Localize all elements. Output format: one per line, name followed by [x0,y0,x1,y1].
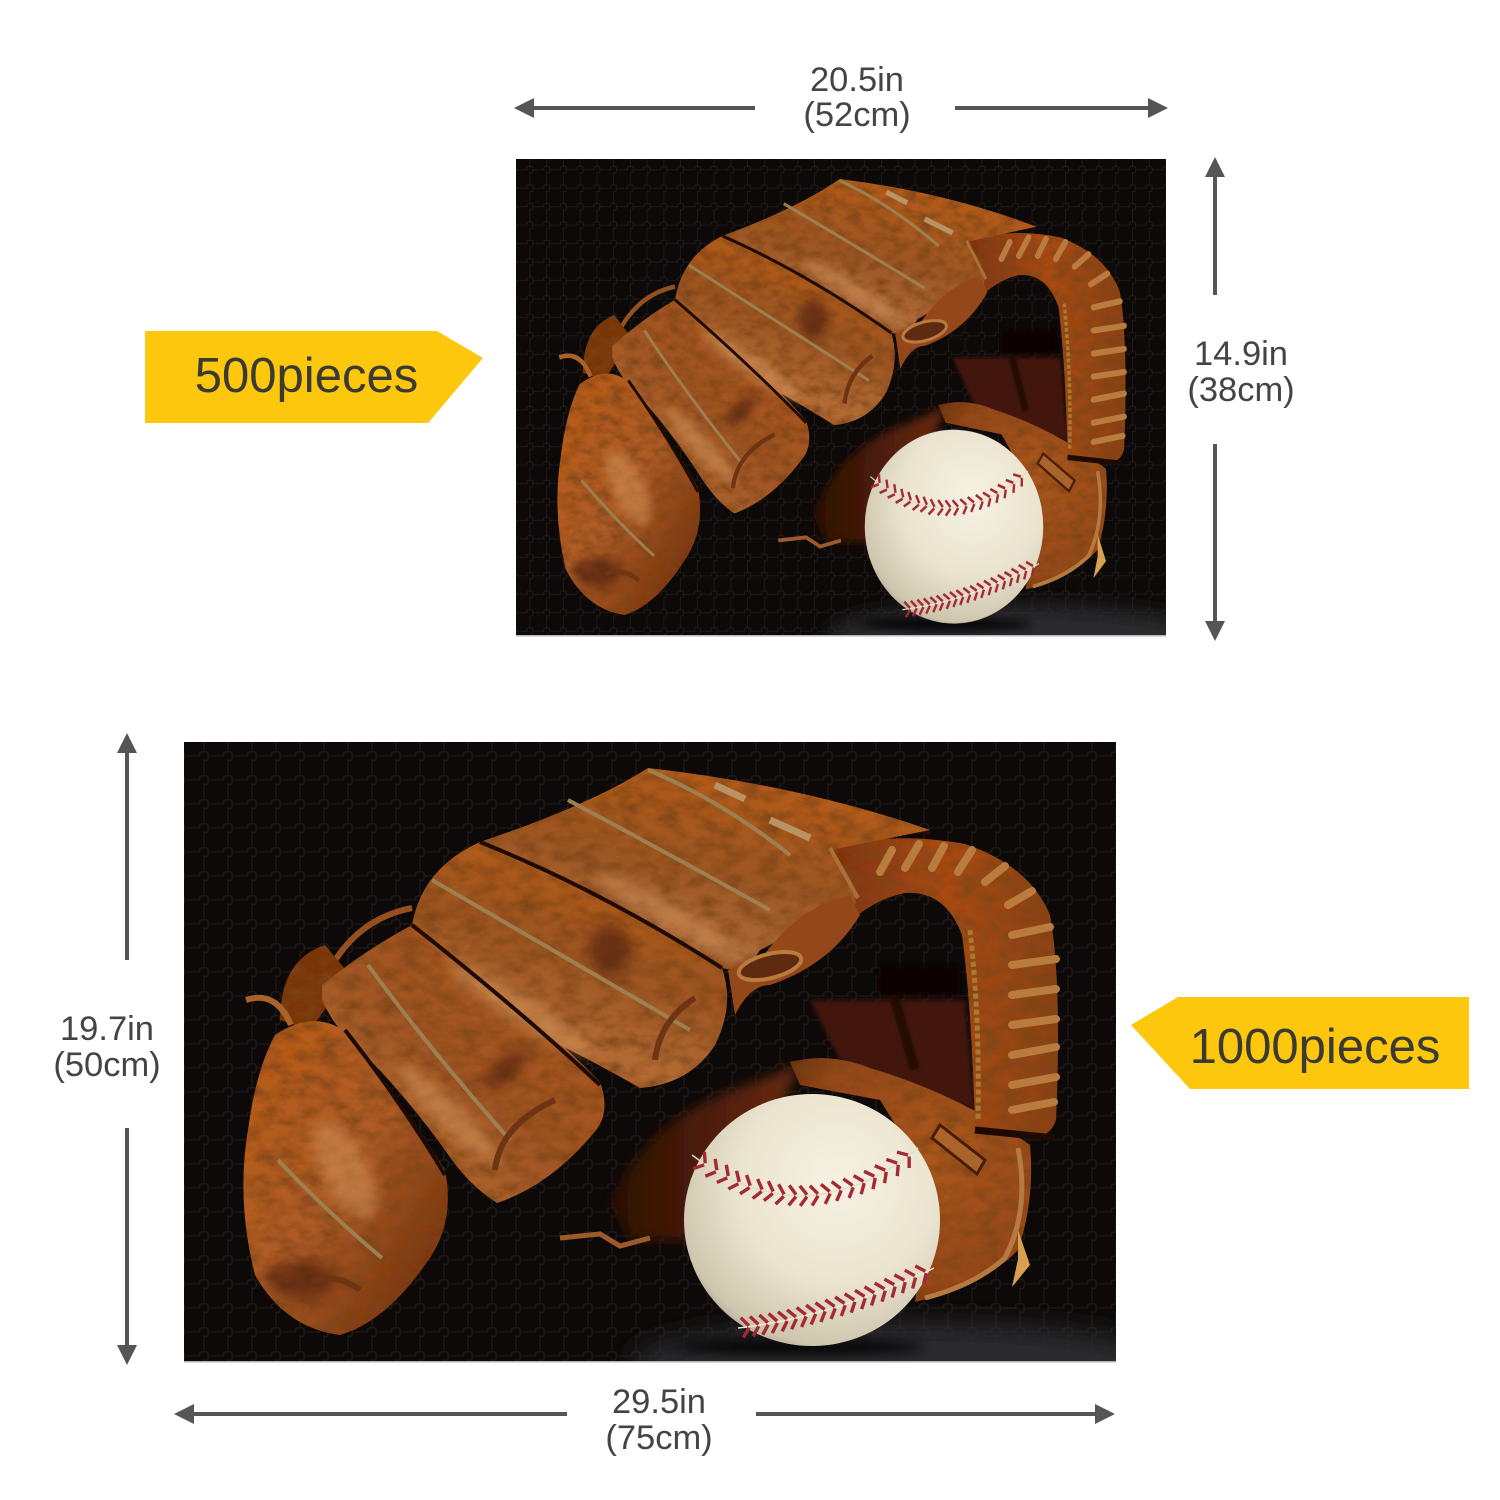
dimension label: 20.5in (52cm) [803,61,911,134]
puzzle image: 1000 pieces [184,742,1170,1402]
dimension label: 19.7in (50cm): (50cm) [53,1046,161,1084]
dimension label: 29.5in (75cm) [605,1383,713,1457]
glove: lace tip [246,998,291,1025]
glove: specular highlights [300,864,750,1229]
glove: dark smudges [265,924,630,1300]
glove: finger end caps [715,785,860,1015]
puzzle background [184,742,1170,1402]
glove: lobe B [322,925,604,1203]
glove [243,768,1058,1335]
dimension label: 14.9in (38cm): (38cm) [1187,371,1295,409]
callout: 500pieces: 500pieces [195,349,418,403]
glove: cuff strap under arch [975,1130,1055,1138]
callout: 1000pieces [1131,997,1469,1089]
dimension label: 14.9in (38cm): 14.9in [1194,335,1288,373]
glove: back lobe [280,945,350,1030]
glove: lobe A [243,1021,448,1335]
glove: web arch [825,838,1058,1138]
dimension label: 14.9in (38cm) [1187,335,1295,409]
glove: arch top shadow line [830,832,930,848]
callout: 1000pieces: 1000pieces [1190,1020,1440,1074]
dimension label: 20.5in (52cm): (52cm) [803,96,911,134]
baseball [675,1094,940,1354]
top stitching [692,1148,918,1196]
glove: lobe D [480,768,930,970]
glove: palm left of ball [610,1065,800,1240]
dimension label: 20.5in (52cm): 20.5in [810,61,904,99]
puzzle image: 500 pieces [516,159,1204,667]
glove: seams [278,770,790,1258]
ball shadow glow [675,1340,925,1354]
puzzle edge shadow small [516,635,1166,636]
dimension arrows: 1000 pieces width [174,1404,1115,1424]
glove: palm behind ball [790,1058,1031,1302]
dimension arrows: 500 pieces height [1205,157,1225,641]
glove: inner webbing shadows [810,965,975,1110]
dimension label: 19.7in (50cm): 19.7in [60,1010,154,1048]
dimension label: 29.5in (75cm): (75cm) [605,1419,713,1457]
ball body [684,1094,940,1346]
glove: wrist loop [322,908,412,985]
glove: palm rim and tassel [925,1125,1030,1298]
callout: 500pieces [145,331,483,423]
puzzle edge shadow [184,1361,1116,1362]
dimension label: 19.7in (50cm) [53,1010,161,1084]
glove: lobe gaps [345,842,722,1175]
dimension arrows: 1000 pieces height [117,733,137,1365]
glove: lace scrap [560,1234,650,1246]
dimension label: 29.5in (75cm): 29.5in [612,1383,706,1421]
glove: arch lacing [880,844,1056,1110]
glove: lobe tips stitched ends [312,998,695,1290]
glove: inner strap seam [970,930,978,1120]
dimension arrows: 500 pieces width [514,98,1168,118]
bottom stitching [738,1268,934,1328]
glove: lobe C [412,842,727,1088]
